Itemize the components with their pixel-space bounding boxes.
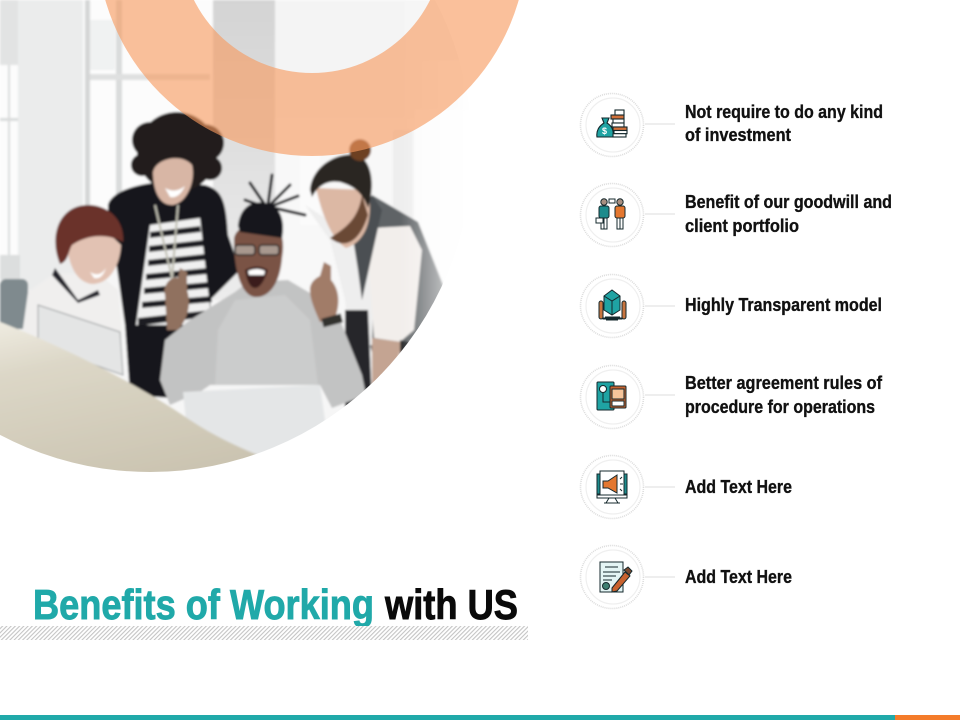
benefit 6 xyxy=(580,546,792,608)
red haired woman xyxy=(22,204,125,330)
text: benefit 2: Benefit of our goodwill and xyxy=(685,192,892,212)
icon: two business people xyxy=(596,199,625,229)
benefit 1 second line: of investment xyxy=(685,125,791,145)
icon: signed contract xyxy=(600,562,632,592)
office background xyxy=(0,0,429,419)
icon: transparent cube on scroll xyxy=(599,290,626,320)
icon: money bag and coins xyxy=(597,110,627,137)
text: benefit 5: Add Text Here xyxy=(685,477,792,497)
text: benefit 1: Not require to do any kind xyxy=(685,102,883,122)
benefit 4 xyxy=(580,366,883,428)
title: Benefits of Working xyxy=(33,581,374,628)
icon: monitor with megaphone xyxy=(597,471,627,503)
benefit 1 xyxy=(580,94,883,156)
text: benefit 4: Better agreement rules of xyxy=(685,373,883,393)
title: with US xyxy=(384,581,518,628)
hatched title underline xyxy=(0,626,528,640)
icon: money bag and coins: $ xyxy=(602,126,607,136)
curly haired woman xyxy=(108,112,240,400)
icon: agreement documents xyxy=(597,382,626,410)
benefit 5 xyxy=(580,456,792,518)
photo: team celebrating at laptop xyxy=(0,0,443,472)
centre man xyxy=(160,175,366,408)
text: benefit 6: Add Text Here xyxy=(685,567,792,587)
footer bar xyxy=(0,715,960,720)
benefit 3 xyxy=(580,274,882,338)
benefit 2 second line: client portfolio xyxy=(685,216,799,236)
foreground partition xyxy=(0,320,256,472)
right man xyxy=(305,139,445,410)
decorative orange ring xyxy=(97,0,527,156)
benefit 2 xyxy=(580,184,892,246)
benefit 4 second line: procedure for operations xyxy=(685,397,875,417)
laptops xyxy=(38,305,325,460)
text: benefit 3: Highly Transparent model xyxy=(685,295,882,315)
right fade xyxy=(402,216,443,348)
